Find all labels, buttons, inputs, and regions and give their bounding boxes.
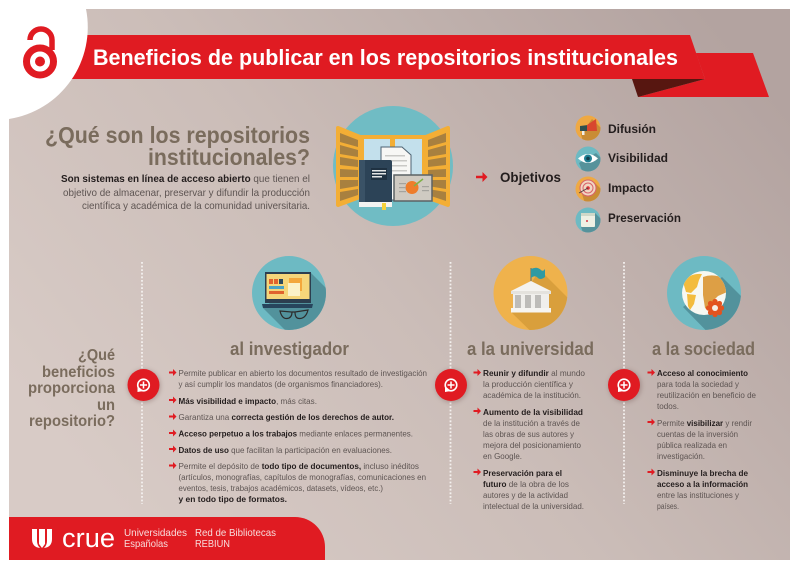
icon: open access lock <box>26 29 54 75</box>
glasses <box>280 310 308 319</box>
heading: a la universidad: a la universidad <box>467 339 594 359</box>
list: benefits for society: todos. <box>657 401 679 411</box>
definition text: Son sistemas en línea de acceso abierto que tienen el <box>61 173 310 185</box>
list: benefits for the university <box>474 368 585 511</box>
list: benefits for the researcher: Acceso perpetuo a los trabajos mediante enlaces permanentes. <box>178 428 413 438</box>
list: benefits for the university: Aumento de la visibilidad <box>483 407 583 417</box>
definition text: científica y académica de la comunidad universitaria. <box>82 200 310 212</box>
definition text: objetivo de almacenar, preservar y difundir la producción <box>63 187 310 199</box>
objective: difusión: Difusión <box>608 122 656 136</box>
left shutter <box>338 128 360 205</box>
objective: preservación: Preservación <box>608 211 681 225</box>
list: benefits for the researcher: Datos de uso que facilitan la participación en evaluaciones. <box>178 445 392 455</box>
right shutter <box>426 128 448 205</box>
list: benefits for society: acceso a la información <box>657 479 748 489</box>
list: benefits for the researcher <box>169 368 427 504</box>
list: benefits for society: Disminuye la brecha de <box>657 468 748 478</box>
list: benefits for the researcher: Permite el depósito de todo tipo de documentos, incluso inéditos <box>178 461 419 471</box>
list: benefits for the university: de la institución a través de <box>483 418 580 428</box>
illustration: window with documents <box>333 106 453 226</box>
list: benefits for the researcher: Más visibilidad e impacto, más citas. <box>178 396 317 406</box>
document <box>381 147 411 200</box>
heading: what benefits: ¿Qué <box>78 347 115 364</box>
list: benefits for society: Permite visibilizar y rendir <box>657 418 752 428</box>
list: benefits for society: pública realizada en <box>657 440 727 450</box>
button: plus 1 <box>128 369 160 402</box>
icon: laptop <box>252 256 326 330</box>
heading: what are repositories <box>45 122 310 170</box>
heading: what are repositories: ¿Qué son los repositorios <box>45 122 310 148</box>
objective: impacto: Impacto <box>608 181 654 195</box>
button: plus 3 <box>608 369 642 402</box>
list: benefits for the researcher: Permite publicar en abierto los documentos resultado de investigación <box>178 368 427 378</box>
objective: impacto <box>576 176 654 202</box>
list: benefits for the researcher: y así cumplir los mandatos (de organismos financiadores). <box>178 379 383 389</box>
objective: difusión <box>576 116 656 140</box>
icon: university building <box>494 256 568 330</box>
footer: crue logo bar: Red de Bibliotecas <box>195 527 276 539</box>
list: benefits for the university: en Google. <box>483 451 522 461</box>
list: benefits for society: para toda la sociedad y <box>657 379 740 389</box>
footer: crue logo bar: Universidades <box>124 527 187 539</box>
footer: crue logo bar: REBIUN <box>195 538 230 550</box>
heading: what are repositories: institucionales? <box>148 144 310 170</box>
list: benefits for society: reutilización en beneficio de <box>657 390 756 400</box>
book <box>359 160 392 210</box>
gear <box>706 299 724 317</box>
footer: crue logo bar: Españolas <box>124 538 168 550</box>
heading: al investigador: al investigador <box>230 339 349 359</box>
objective: visibilidad: Visibilidad <box>608 151 668 165</box>
heading: what benefits: beneficios <box>42 364 115 381</box>
list: benefits for society <box>648 368 756 511</box>
title: Beneficios de publicar en los repositorios institucionales <box>93 45 678 70</box>
list: benefits for the researcher: (artículos, monografías, capítulos de monografías, comunicaciones en <box>178 472 426 482</box>
heading: what benefits: repositorio? <box>29 413 115 430</box>
arrow: objectives <box>476 172 488 182</box>
list: benefits for society: cuentas de la inversión <box>657 429 738 439</box>
list: benefits for the university: autores y de la actividad <box>483 490 568 500</box>
heading: what benefits <box>28 347 115 430</box>
list: benefits for the university: académica de la institución. <box>483 390 581 400</box>
button: plus 2 <box>435 369 468 402</box>
objective: preservación <box>576 208 680 232</box>
heading: a la sociedad: a la sociedad <box>652 339 755 359</box>
open access badge <box>0 0 88 119</box>
heading: what benefits: proporciona <box>28 380 115 397</box>
list: benefits for the university: futuro de la obra de los <box>483 479 569 489</box>
list: benefits for the university: intelectual de la universidad. <box>483 501 584 511</box>
title banner <box>60 35 769 97</box>
list: benefits for the university: mejora del posicionamiento <box>483 440 581 450</box>
list: benefits for society: investigación. <box>657 451 705 461</box>
definition text <box>61 173 310 212</box>
list: benefits for the university: Reunir y difundir al mundo <box>483 368 585 378</box>
dotted dividers <box>142 262 624 504</box>
list: benefits for the researcher: eventos, tesis, trabajos académicos, datasets, vídeos, etc.) <box>178 483 383 493</box>
icon: crue shield <box>32 529 52 548</box>
list: benefits for the university: las obras de sus autores y <box>483 429 575 439</box>
footer: crue logo bar: crue <box>62 523 115 553</box>
list: benefits for society: países. <box>657 501 679 511</box>
footer: crue logo bar <box>9 517 325 560</box>
window frame <box>358 135 428 197</box>
list: benefits for the researcher: y en todo tipo de formatos. <box>178 494 287 504</box>
list: benefits for society: entre las instituciones y <box>657 490 740 500</box>
objectives label: Objetivos <box>500 170 561 185</box>
icon: globe <box>667 256 741 330</box>
list: benefits for society: Acceso al conocimiento <box>657 368 748 378</box>
heading: what benefits: un <box>97 397 115 414</box>
chart board <box>394 175 432 201</box>
objective: visibilidad <box>576 146 668 172</box>
list: benefits for the researcher: Garantiza una correcta gestión de los derechos de autor. <box>178 412 394 422</box>
list: benefits for the university: Preservación para el <box>483 468 562 478</box>
list: benefits for the university: la producción científica y <box>483 379 574 389</box>
